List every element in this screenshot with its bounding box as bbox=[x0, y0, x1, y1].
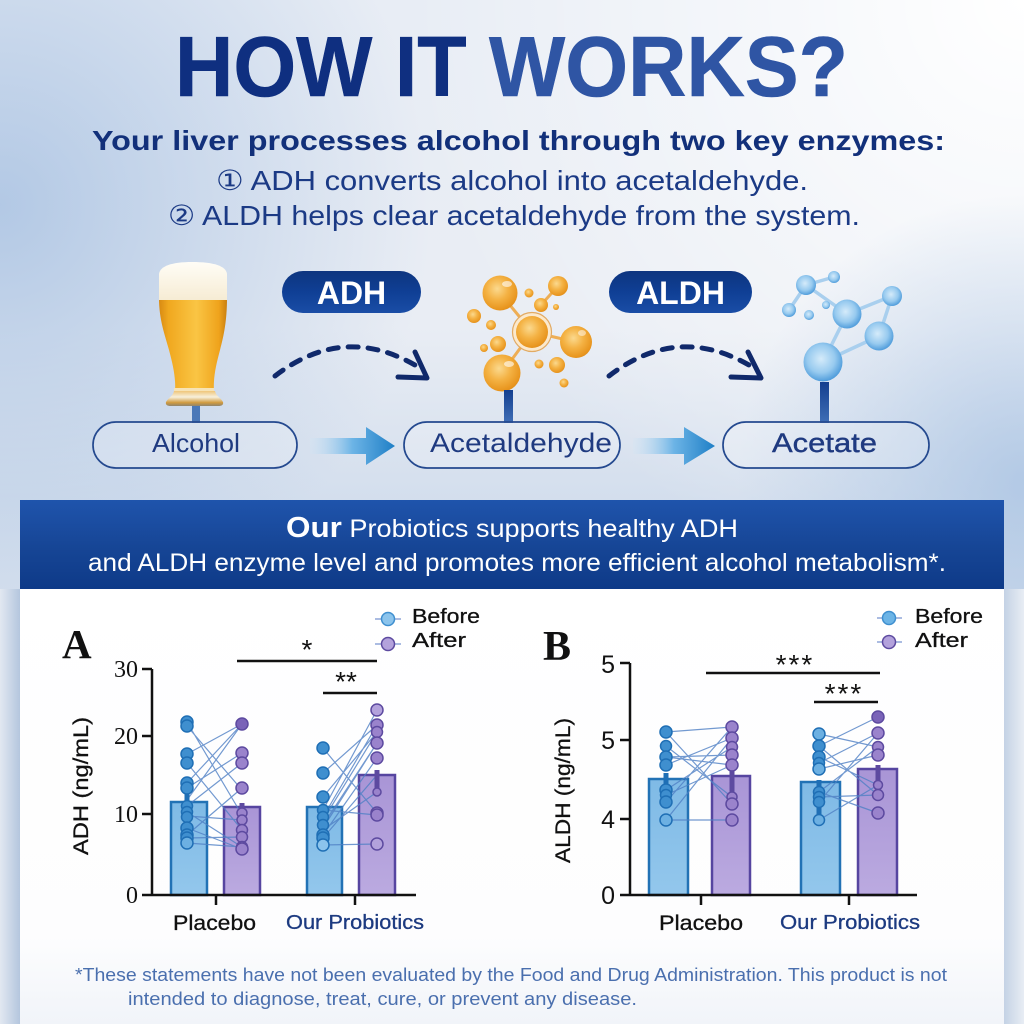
chart B legend: After bbox=[915, 630, 968, 652]
icon: beer glass bbox=[159, 262, 227, 423]
label: Acetate: Acetate bbox=[772, 428, 877, 458]
chart A bars bbox=[171, 775, 395, 895]
panel: results background bbox=[20, 589, 1004, 1024]
chart B paired lines bbox=[666, 717, 878, 820]
chart A significance brackets: ** bbox=[335, 666, 357, 697]
subtitle: enzymes intro bbox=[92, 125, 945, 231]
molecule: acetaldehyde bbox=[467, 276, 592, 423]
footnote disclaimer: *These statements have not been evaluated by the Food and Drug Administration. This product is not bbox=[75, 965, 947, 985]
chart B: ALDH bbox=[543, 606, 983, 935]
chart A label: A bbox=[62, 621, 92, 667]
chart A axes: 30 bbox=[114, 657, 138, 683]
chart B legend bbox=[877, 606, 983, 652]
label: Acetaldehyde bbox=[404, 422, 620, 468]
panel header: and ALDH enzyme level and promotes more efficient alcohol metabolism*. bbox=[88, 549, 946, 577]
subtitle: enzymes intro: ① ADH converts alcohol into acetaldehyde. bbox=[216, 165, 808, 196]
chart A axes: Our Probiotics bbox=[286, 912, 424, 934]
title: HOW IT WORKS? bbox=[175, 20, 848, 115]
chart A paired lines bbox=[187, 710, 377, 849]
chart B before dots bbox=[660, 726, 825, 826]
chart B axes: Placebo bbox=[659, 912, 743, 935]
chart B axes: ALDH (ng/mL) bbox=[552, 718, 575, 863]
label: Acetaldehyde: Acetaldehyde bbox=[430, 428, 612, 458]
chart B axes bbox=[552, 651, 920, 935]
chart B after dots bbox=[726, 711, 884, 826]
badge: ALDH: ALDH bbox=[636, 275, 725, 311]
arrow: dashed ALDH bbox=[609, 347, 761, 378]
arrow: dashed ADH bbox=[275, 347, 427, 378]
label: Alcohol: Alcohol bbox=[152, 428, 240, 458]
panel header: Our Probiotics supports healthy ADH bbox=[286, 512, 738, 544]
footnote disclaimer: intended to diagnose, treat, cure, or prevent any disease. bbox=[128, 989, 637, 1009]
chart A: ADH bbox=[62, 606, 480, 935]
badge: ALDH bbox=[609, 271, 752, 313]
chart A significance brackets: * bbox=[302, 634, 313, 665]
chart A axes bbox=[70, 657, 424, 935]
label: Acetate bbox=[723, 422, 929, 468]
chart B axes: 0 bbox=[601, 882, 615, 910]
panel header bbox=[20, 500, 1004, 589]
chart A axes: 20 bbox=[114, 724, 138, 750]
chart B significance brackets bbox=[706, 649, 880, 709]
chart A after dots bbox=[236, 704, 383, 855]
chart B bars bbox=[649, 769, 897, 895]
chart B legend: Before bbox=[915, 606, 983, 628]
molecule: acetate bbox=[782, 271, 902, 423]
badge: ADH bbox=[282, 271, 421, 313]
chart A axes: ADH (ng/mL) bbox=[70, 717, 93, 855]
subtitle: enzymes intro: ② ALDH helps clear acetaldehyde from the system. bbox=[168, 200, 860, 231]
label: Alcohol bbox=[93, 422, 297, 468]
footnote disclaimer bbox=[75, 965, 947, 1009]
chart A before dots bbox=[181, 716, 329, 851]
chart B significance brackets: *** bbox=[825, 678, 863, 709]
chart A axes: 10 bbox=[114, 802, 138, 828]
chart A axes: Placebo bbox=[173, 912, 256, 935]
subtitle: enzymes intro: Your liver processes alcohol through two key enzymes: bbox=[92, 125, 945, 156]
chart B label: B bbox=[543, 624, 571, 670]
chart A axes: 0 bbox=[126, 883, 138, 909]
arrow: alcohol to acetaldehyde bbox=[310, 427, 395, 465]
chart B significance brackets: *** bbox=[776, 649, 814, 680]
chart A legend: Before bbox=[412, 606, 480, 628]
chart B axes: 5 bbox=[601, 727, 615, 755]
chart B axes: Our Probiotics bbox=[780, 912, 920, 934]
chart A significance brackets bbox=[237, 634, 377, 697]
arrow: acetaldehyde to acetate bbox=[633, 427, 715, 465]
chart A legend: After bbox=[412, 630, 466, 652]
badge: ADH: ADH bbox=[317, 275, 386, 311]
chart B axes: 5 bbox=[601, 651, 615, 679]
chart B axes: 4 bbox=[601, 806, 615, 834]
chart A legend bbox=[375, 606, 480, 652]
